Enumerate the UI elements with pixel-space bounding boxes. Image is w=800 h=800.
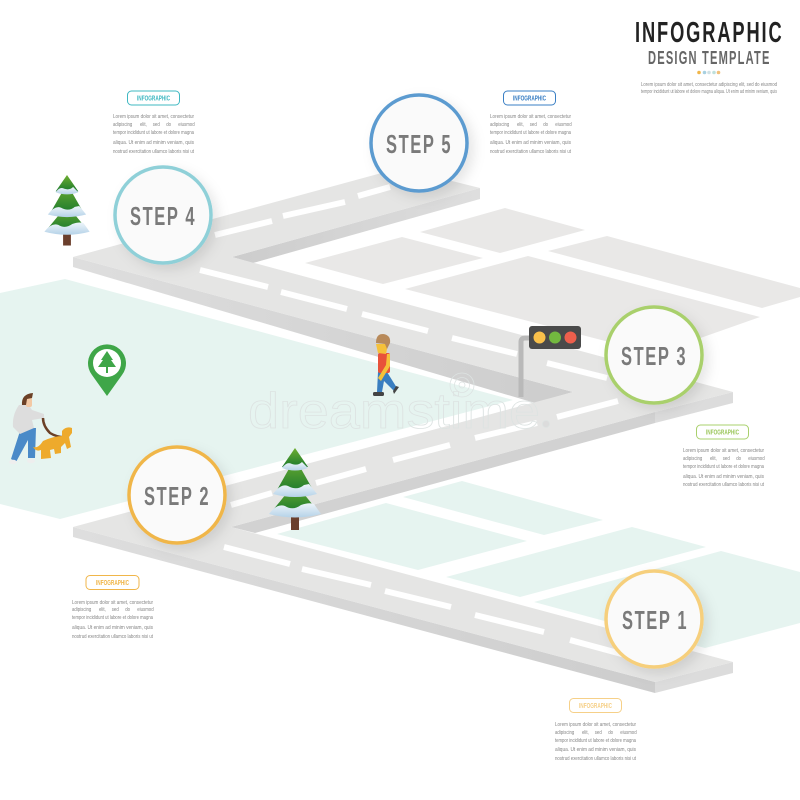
info block: step 4: tempor incididunt ut labore et dolore magna — [113, 130, 195, 136]
info block: step 3: eiusmod — [748, 455, 765, 462]
step 1 marker: STEP 1 — [622, 605, 688, 635]
info block: step 1: eiusmod — [620, 729, 637, 736]
info block: step 2: aliqua. Ut enim ad minim veniam, quis — [72, 625, 153, 631]
step 4 marker — [115, 167, 211, 263]
info block: step 1: sed — [595, 729, 602, 736]
info block: step 4: adipiscing — [113, 121, 132, 128]
icon: traffic light — [521, 326, 581, 397]
info block: step 2: Lorem ipsum dolor sit amet, consectetur — [72, 600, 153, 606]
info block: step 3: INFOGRAPHIC — [706, 430, 739, 436]
watermark: dreamstime — [248, 383, 540, 439]
step 3 marker: STEP 3 — [621, 341, 687, 371]
info block: step 1: adipiscing — [555, 729, 574, 736]
info block: step 2: tempor incididunt ut labore et dolore magna — [72, 615, 154, 621]
info block: step 5 — [490, 91, 572, 155]
title description text — [641, 82, 777, 95]
info block: step 1: Lorem ipsum dolor sit amet, consectetur — [555, 722, 636, 728]
step 5 marker — [371, 95, 467, 191]
icon: walking child — [373, 334, 399, 396]
panel: upper grey city blocks — [305, 208, 800, 354]
info block: step 1: do — [608, 729, 613, 736]
title: INFOGRAPHIC — [635, 17, 784, 49]
info block: step 2: nostrud exercitation ullamco laboris nisi ut — [72, 634, 153, 640]
step 2 marker: STEP 2 — [144, 481, 210, 511]
step 4 marker: STEP 4 — [130, 201, 196, 231]
title — [635, 17, 784, 69]
info block: step 2: elit, — [99, 606, 106, 613]
info block: step 1: INFOGRAPHIC — [579, 703, 612, 710]
info block: step 5: sed — [530, 121, 537, 128]
road lane dashes — [200, 187, 640, 659]
panel: lower green city blocks — [277, 481, 800, 648]
info block: step 3 — [683, 425, 765, 488]
panel: isometric road — [73, 168, 733, 693]
info block: step 3: sed — [723, 455, 730, 462]
info block: step 1: tempor incididunt ut labore et dolore magna — [555, 738, 637, 744]
info block: step 2: INFOGRAPHIC — [96, 580, 129, 587]
info block: step 5: tempor incididunt ut labore et dolore magna — [490, 130, 572, 136]
info block: step 3: adipiscing — [683, 455, 702, 462]
icon: snowy pine tree left — [44, 175, 90, 246]
info block: step 4: elit, — [140, 121, 147, 128]
info block: step 3: elit, — [710, 455, 717, 462]
info block: step 1: aliqua. Ut enim ad minim veniam, quis — [555, 747, 636, 753]
info block: step 5: nostrud exercitation ullamco laboris nisi ut — [490, 149, 571, 155]
info block: step 2: adipiscing — [72, 606, 91, 613]
info block: step 5: Lorem ipsum dolor sit amet, consectetur — [490, 114, 571, 120]
info block: step 1: elit, — [582, 729, 589, 736]
info block: step 3: nostrud exercitation ullamco laboris nisi ut — [683, 482, 764, 488]
info block: step 3: aliqua. Ut enim ad minim veniam, quis — [683, 474, 764, 480]
info block: step 5: INFOGRAPHIC — [513, 96, 546, 102]
info block: step 4: aliqua. Ut enim ad minim veniam, quis — [113, 140, 194, 146]
info block: step 5: do — [543, 121, 548, 128]
info block: step 2: eiusmod — [137, 606, 154, 613]
info block: step 3: do — [736, 455, 741, 462]
info block: step 5: aliqua. Ut enim ad minim veniam, quis — [490, 140, 571, 146]
step 1 marker — [606, 571, 702, 667]
info block: step 2 — [72, 576, 154, 640]
info block: step 4: sed — [153, 121, 160, 128]
info block: step 4: do — [166, 121, 171, 128]
info block: step 5: eiusmod — [555, 121, 572, 128]
step 3 marker — [606, 307, 702, 403]
icon: person walking dog — [9, 393, 72, 464]
info block: step 4 — [113, 91, 195, 155]
info block: step 1: nostrud exercitation ullamco laboris nisi ut — [555, 756, 636, 762]
info block: step 4: Lorem ipsum dolor sit amet, consectetur — [113, 114, 194, 120]
info block: step 2: sed — [112, 606, 119, 613]
title decoration dots — [697, 71, 720, 74]
info block: step 5: adipiscing — [490, 121, 509, 128]
info block: step 4: eiusmod — [178, 121, 195, 128]
info block: step 5: elit, — [517, 121, 524, 128]
panel: green park ground — [0, 279, 513, 519]
info block: step 3: Lorem ipsum dolor sit amet, consectetur — [683, 448, 764, 454]
icon: snowy pine tree centre — [269, 448, 321, 530]
step 5 marker: STEP 5 — [386, 129, 452, 159]
step 2 marker — [129, 447, 225, 543]
title: DESIGN TEMPLATE — [648, 48, 771, 69]
icon: green tree location pin — [88, 344, 126, 396]
info block: step 1 — [555, 698, 637, 762]
info block: step 2: do — [125, 606, 130, 613]
info block: step 4: INFOGRAPHIC — [137, 96, 170, 102]
info block: step 4: nostrud exercitation ullamco laboris nisi ut — [113, 149, 194, 155]
info block: step 3: tempor incididunt ut labore et dolore magna — [683, 464, 765, 470]
